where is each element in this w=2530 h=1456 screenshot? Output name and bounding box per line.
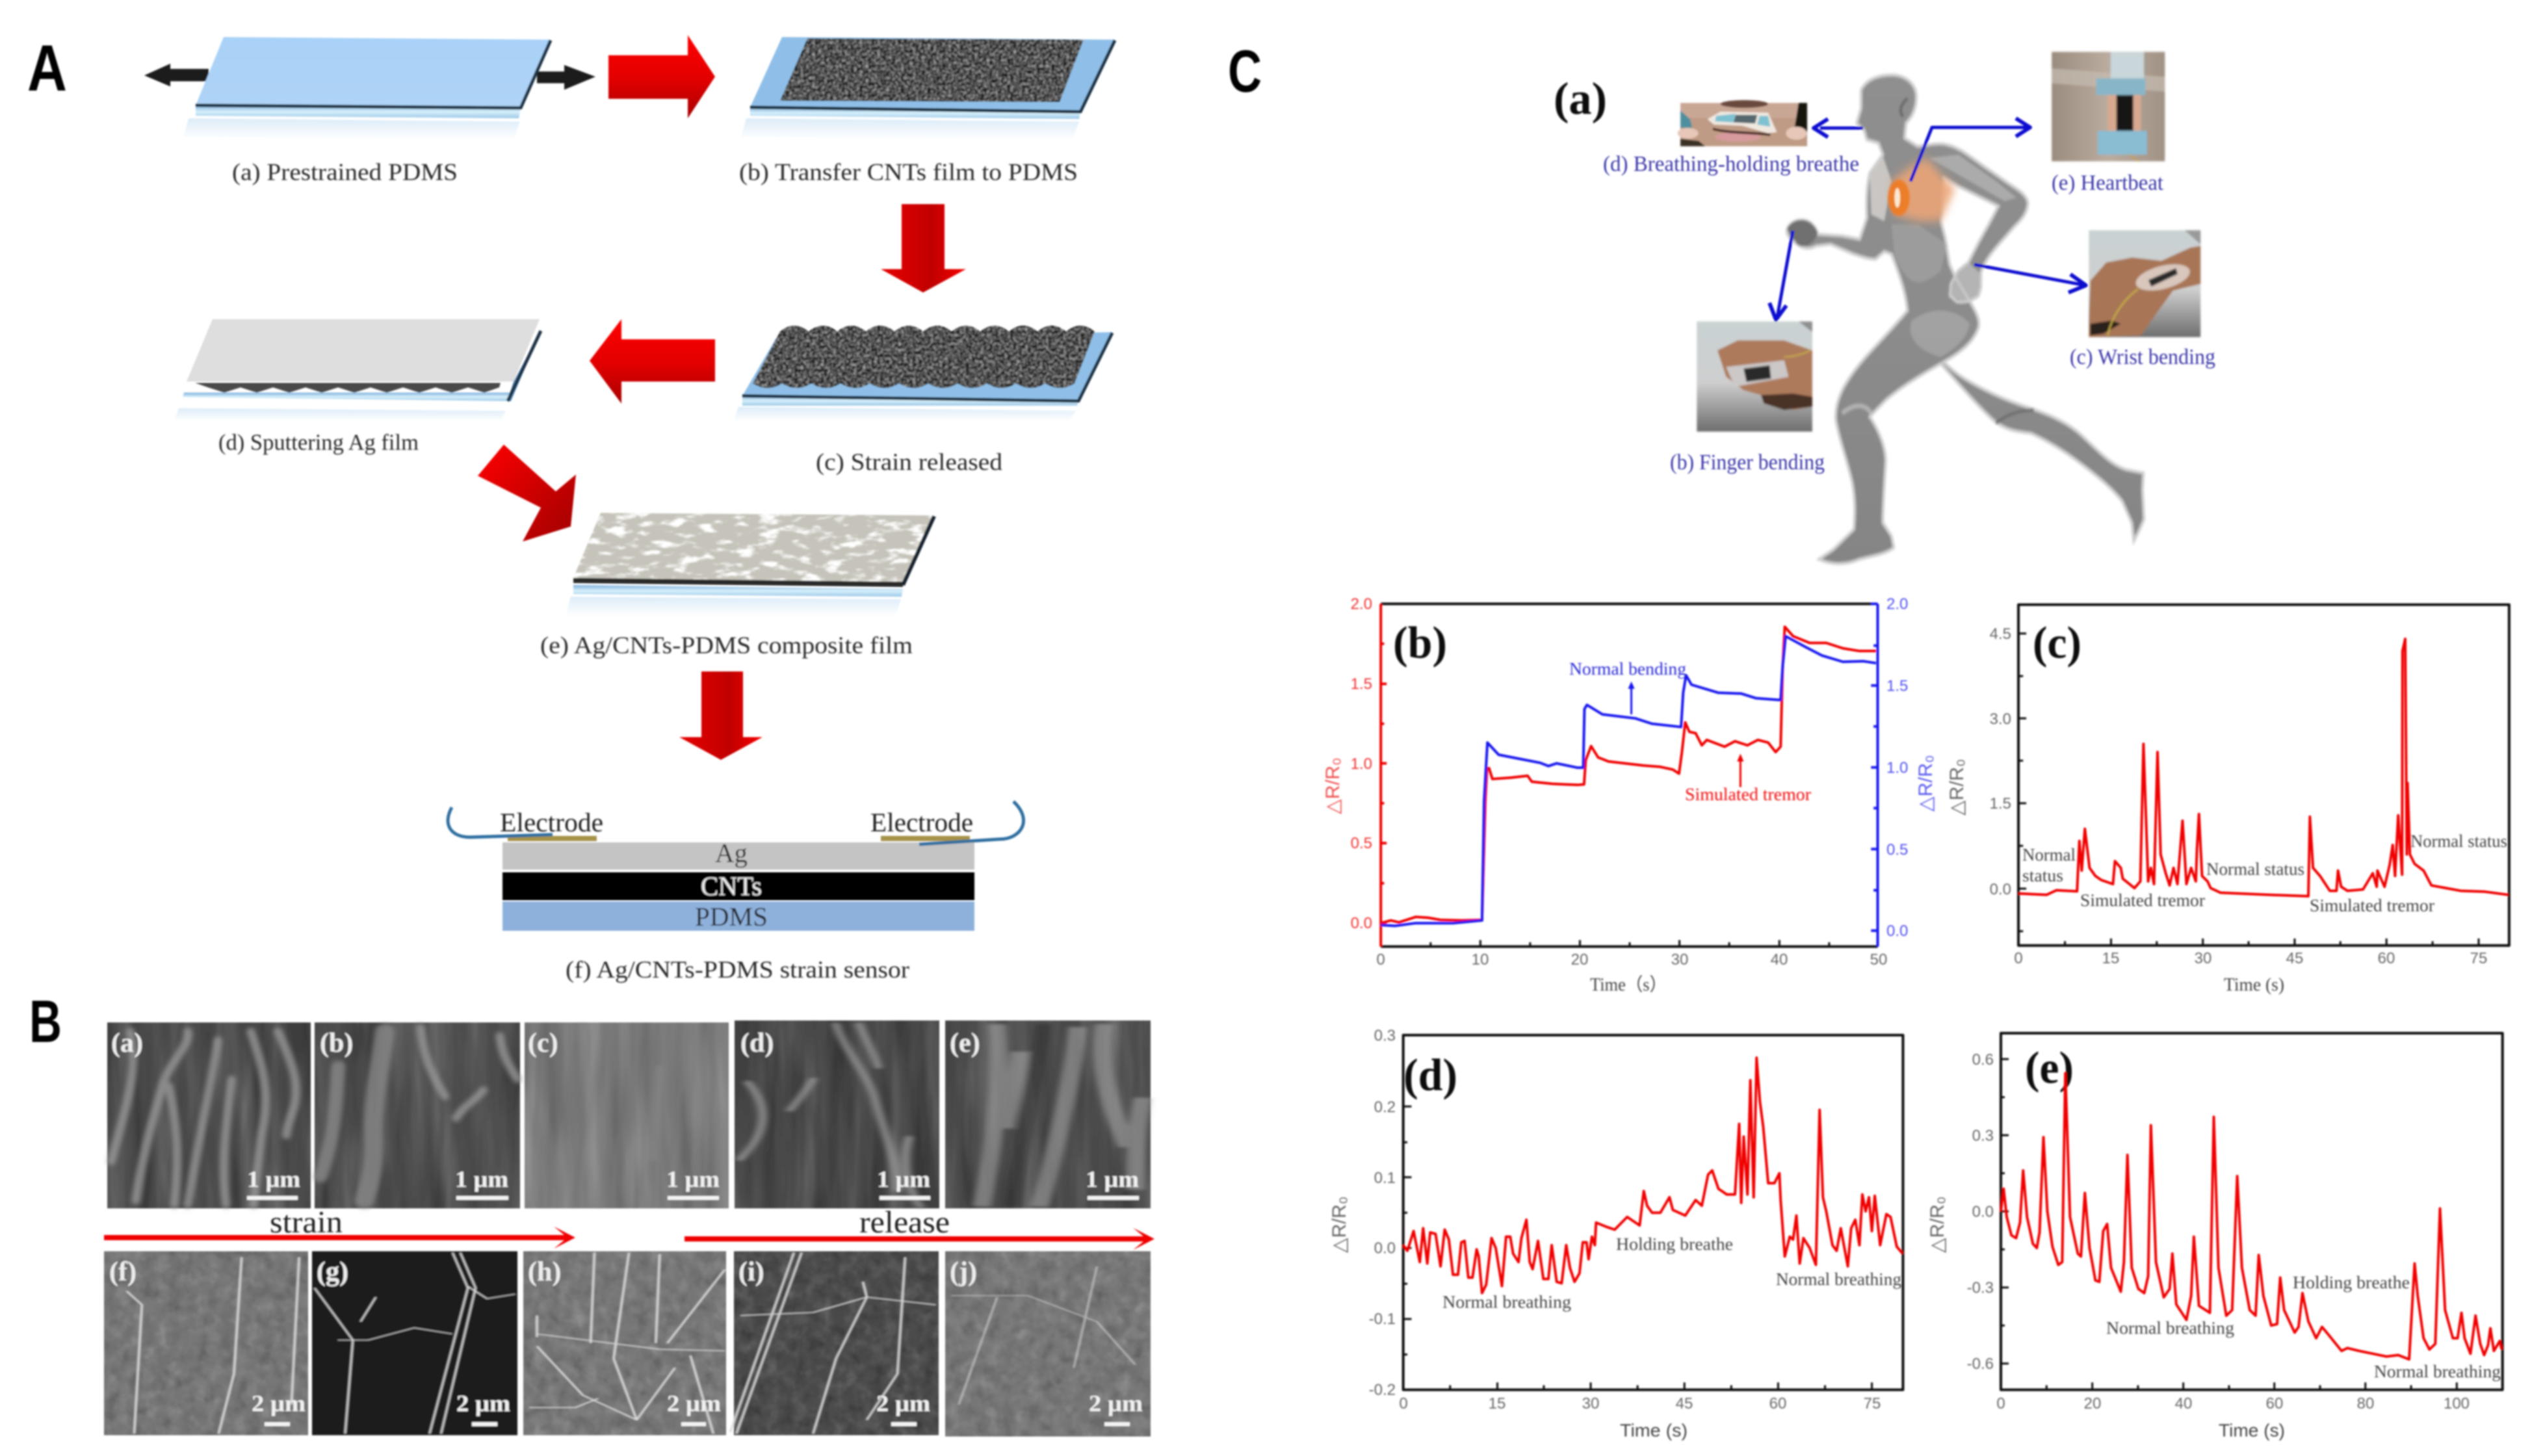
curve: simulated tremor	[1381, 627, 1876, 923]
x ticks: 15	[1489, 1395, 1506, 1412]
SEM panel letters: (d)	[740, 1028, 774, 1058]
scale bars 1 um	[247, 1166, 1139, 1200]
arrow: release	[685, 1228, 1154, 1250]
x ticks: 40	[2175, 1395, 2192, 1412]
scale bars 1 um: 1 µm	[1086, 1166, 1139, 1192]
label (c): (c)	[2033, 618, 2081, 668]
arrow: to mouth	[1814, 119, 1863, 137]
x ticks: 50	[1870, 951, 1887, 968]
y ticks: 0.0	[1972, 1203, 1994, 1221]
step c: strain released wavy film	[733, 326, 1112, 421]
x ticks: 60	[2266, 1395, 2283, 1412]
y ticks	[1369, 1027, 1396, 1399]
y ticks: -0.2	[1369, 1381, 1396, 1399]
SEM panel letters: (h)	[528, 1257, 561, 1287]
annotations: Normal breathing	[2374, 1362, 2501, 1381]
y label: △R/R₀	[1946, 759, 1968, 816]
SEM c	[525, 1022, 729, 1208]
SEM panel letters: (i)	[738, 1257, 764, 1287]
x axis title: Time (s)	[2224, 975, 2284, 995]
arrow: strain	[104, 1227, 575, 1249]
left ticks	[1351, 595, 1372, 932]
panel: A fabrication process	[27, 32, 1115, 983]
x ticks: 0	[1399, 1395, 1408, 1412]
figure: running man	[1787, 75, 2144, 564]
annotations	[2106, 1273, 2501, 1381]
x ticks: 20	[2084, 1395, 2101, 1412]
chart c axes and curve	[2018, 604, 2509, 946]
SEM panel letters: (e)	[950, 1028, 980, 1058]
arrow: red right	[608, 35, 715, 118]
y ticks: -0.1	[1369, 1310, 1396, 1328]
step d: sputtering Ag	[174, 319, 541, 421]
caption: breathing: (d) Breathing-holding breathe	[1603, 152, 1859, 176]
heading: A: A	[27, 32, 67, 105]
y ticks: 0.0	[1374, 1240, 1396, 1257]
panel: B SEM images	[29, 989, 1154, 1436]
photo: wrist sensor	[2089, 230, 2200, 337]
x ticks: 0	[2014, 950, 2023, 967]
chart e axes and curve	[2001, 1033, 2503, 1390]
annotations: Holding breathe	[2293, 1273, 2410, 1292]
annotation: normal bending: Normal bending	[1569, 659, 1686, 679]
caption d: (d) Sputtering Ag film	[218, 430, 419, 455]
y ticks: -0.3	[1967, 1279, 1994, 1297]
arrow: simulated tremor	[1737, 753, 1743, 787]
annotations: Holding breathe	[1616, 1234, 1733, 1254]
scale bars 2 um: 2 µm	[1089, 1390, 1143, 1416]
label: strain: strain	[270, 1205, 343, 1240]
chart d axes and curve	[1403, 1035, 1903, 1390]
SEM d	[735, 1020, 939, 1208]
label: (a): (a)	[1554, 74, 1607, 124]
y ticks	[1990, 625, 2011, 898]
y ticks: 3.0	[1990, 710, 2011, 728]
photo: finger sensor	[1697, 322, 1812, 432]
right ticks: 1.0	[1886, 759, 1908, 777]
curve: tremor response	[2018, 639, 2509, 896]
annotations	[2022, 831, 2507, 915]
photo: mouth sensor	[1678, 100, 1807, 146]
SEM panel letters: (j)	[950, 1257, 977, 1287]
arrow: red diagonal	[478, 445, 576, 541]
arrow: to heartbeat	[1911, 118, 2030, 181]
x ticks: 45	[1676, 1395, 1693, 1412]
annotations: Normal	[2022, 845, 2076, 864]
scale bars 1 um: 1 µm	[247, 1166, 300, 1192]
SEM g	[312, 1251, 517, 1435]
SEM panel letters: (g)	[317, 1257, 348, 1287]
x axis title: Time (s)	[2219, 1420, 2285, 1440]
left ticks: 1.0	[1351, 755, 1372, 773]
label: Ag: Ag	[715, 838, 748, 868]
caption b: (b) Transfer CNTs film to PDMS	[739, 159, 1078, 186]
y ticks: 0.6	[1972, 1051, 1994, 1069]
y ticks: 0.3	[1374, 1027, 1396, 1045]
chest glow	[1888, 158, 1955, 221]
right ticks	[1886, 595, 1908, 940]
SEM j	[945, 1251, 1151, 1436]
x ticks: 10	[1472, 951, 1489, 968]
right y label: △R/R₀	[1915, 755, 1937, 812]
label: Electrode left: Electrode	[500, 807, 603, 837]
x axis title: Time（s）	[1590, 974, 1667, 995]
y label: △R/R₀	[1329, 1196, 1350, 1253]
annotations: Normal breathing	[1776, 1269, 1901, 1289]
photo: heartbeat sensor	[2052, 52, 2165, 161]
y ticks: 0.0	[1990, 881, 2011, 898]
y ticks: 1.5	[1990, 795, 2011, 812]
layer: CNTs	[502, 872, 974, 900]
SEM h	[523, 1251, 726, 1435]
SEM e	[945, 1020, 1151, 1208]
x ticks: 60	[1769, 1395, 1786, 1412]
annotations: Normal status	[2410, 831, 2507, 851]
x ticks: 30	[1671, 951, 1688, 968]
label (b): (b)	[1393, 618, 1447, 668]
y ticks: 0.2	[1374, 1098, 1396, 1116]
step e: composite film	[566, 513, 934, 616]
caption c: (c) Strain released	[816, 449, 1003, 476]
annotations: status	[2022, 866, 2063, 885]
heading: C: C	[1228, 38, 1262, 105]
x ticks	[1399, 1395, 1881, 1412]
x ticks: 30	[2195, 950, 2211, 967]
arrow: to wrist	[1974, 265, 2086, 292]
annotations: Simulated tremor	[2080, 890, 2205, 910]
x axis title: Time (s)	[1620, 1420, 1688, 1440]
arrow: normal bending	[1628, 681, 1635, 714]
curve: heartbeat	[2001, 1073, 2501, 1359]
caption f: (f) Ag/CNTs-PDMS strain sensor	[566, 957, 909, 983]
chart d	[1329, 1027, 1903, 1440]
left ticks: 0.5	[1351, 835, 1372, 852]
SEM b	[315, 1022, 520, 1208]
scale bars 2 um	[252, 1390, 1143, 1426]
curve: breathing	[1403, 1058, 1903, 1293]
electrode wires	[448, 801, 1023, 844]
SEM panel letters: (f)	[109, 1257, 137, 1287]
arrow: to finger	[1769, 231, 1793, 320]
right ticks: 1.5	[1886, 677, 1908, 695]
SEM a	[107, 1022, 311, 1208]
x ticks: 15	[2102, 950, 2119, 967]
x ticks: 0	[1996, 1395, 2005, 1412]
scale bars 2 um: 2 µm	[876, 1390, 930, 1416]
caption: finger: (b) Finger bending	[1670, 450, 1825, 474]
label (e): (e)	[2025, 1043, 2074, 1093]
annotations: Simulated tremor	[2310, 896, 2434, 915]
chart c	[1946, 604, 2509, 995]
panel: C wearable applications	[1228, 38, 2509, 1440]
scale bars 2 um: 2 µm	[252, 1390, 306, 1416]
scale bars 2 um: 2 µm	[456, 1390, 510, 1416]
SEM row: release series 2 um	[104, 1251, 1151, 1436]
label: PDMS: PDMS	[695, 902, 768, 931]
x ticks: 30	[1582, 1395, 1599, 1412]
x ticks: 80	[2357, 1395, 2374, 1412]
step b: CNT film on PDMS	[741, 37, 1115, 140]
y ticks: 0.3	[1972, 1127, 1994, 1145]
x ticks	[1376, 951, 1887, 968]
chart b	[1322, 595, 1937, 995]
layer: Ag	[502, 842, 974, 870]
y ticks: -0.6	[1967, 1355, 1994, 1373]
curve: normal bending	[1381, 636, 1876, 926]
arrow: red down 2	[679, 671, 763, 760]
x ticks: 75	[2470, 950, 2487, 967]
layer: PDMS	[502, 902, 974, 931]
label: Electrode right: Electrode	[870, 807, 973, 837]
label: CNTs: CNTs	[701, 871, 762, 901]
right ticks: 0.5	[1886, 841, 1908, 859]
x ticks: 100	[2444, 1395, 2470, 1412]
SEM panel letters: (a)	[111, 1028, 143, 1058]
chart b axes and curves	[1381, 604, 1878, 946]
right ticks: 0.0	[1886, 922, 1908, 940]
x ticks: 45	[2286, 950, 2303, 967]
caption: heartbeat: (e) Heartbeat	[2052, 171, 2164, 195]
caption: wrist: (c) Wrist bending	[2070, 345, 2215, 369]
annotations	[1442, 1234, 1901, 1312]
label (d): (d)	[1403, 1050, 1457, 1100]
left y label: △R/R₀	[1322, 757, 1344, 814]
left ticks: 1.5	[1351, 675, 1372, 693]
x ticks: 75	[1864, 1395, 1881, 1412]
y ticks	[1967, 1051, 1994, 1373]
annotations: Normal status	[2206, 859, 2304, 879]
arrow: red down 1	[881, 204, 966, 292]
x ticks: 40	[1771, 951, 1788, 968]
SEM panel letters: (c)	[528, 1028, 558, 1058]
left ticks: 0.0	[1351, 915, 1372, 932]
annotation: simulated tremor: Simulated tremor	[1685, 785, 1811, 804]
left ticks: 2.0	[1351, 595, 1372, 613]
annotations: Normal breathing	[2106, 1318, 2234, 1338]
scale bars 1 um: 1 µm	[455, 1166, 508, 1192]
y ticks: 4.5	[1990, 625, 2011, 643]
x ticks	[1996, 1395, 2470, 1412]
SEM row: strain series 1 um	[107, 1020, 1151, 1208]
heading: B: B	[29, 989, 62, 1055]
y label: △R/R₀	[1927, 1196, 1948, 1253]
SEM panel letters: (b)	[320, 1028, 353, 1058]
right ticks: 2.0	[1886, 595, 1908, 613]
scale bars 1 um: 1 µm	[666, 1166, 720, 1192]
scale bars 2 um: 2 µm	[667, 1390, 721, 1416]
x ticks: 0	[1376, 951, 1385, 968]
step a: prestrained PDMS slab	[144, 37, 595, 140]
SEM f	[104, 1251, 308, 1435]
SEM panel letters	[109, 1028, 980, 1287]
label: release: release	[859, 1205, 950, 1240]
arrow: red left	[590, 319, 715, 404]
caption e: (e) Ag/CNTs-PDMS composite film	[540, 632, 913, 659]
x ticks: 60	[2378, 950, 2395, 967]
electrode pads	[508, 836, 970, 841]
x ticks: 20	[1571, 951, 1588, 968]
x ticks	[2014, 950, 2487, 967]
annotations: Normal breathing	[1442, 1292, 1571, 1312]
sensor cross-section	[448, 801, 1023, 931]
y ticks: 0.1	[1374, 1169, 1396, 1187]
caption a: (a) Prestrained PDMS	[232, 159, 458, 186]
SEM i	[730, 1251, 939, 1435]
scale bars 1 um: 1 µm	[877, 1166, 930, 1192]
chart e	[1927, 1033, 2503, 1440]
